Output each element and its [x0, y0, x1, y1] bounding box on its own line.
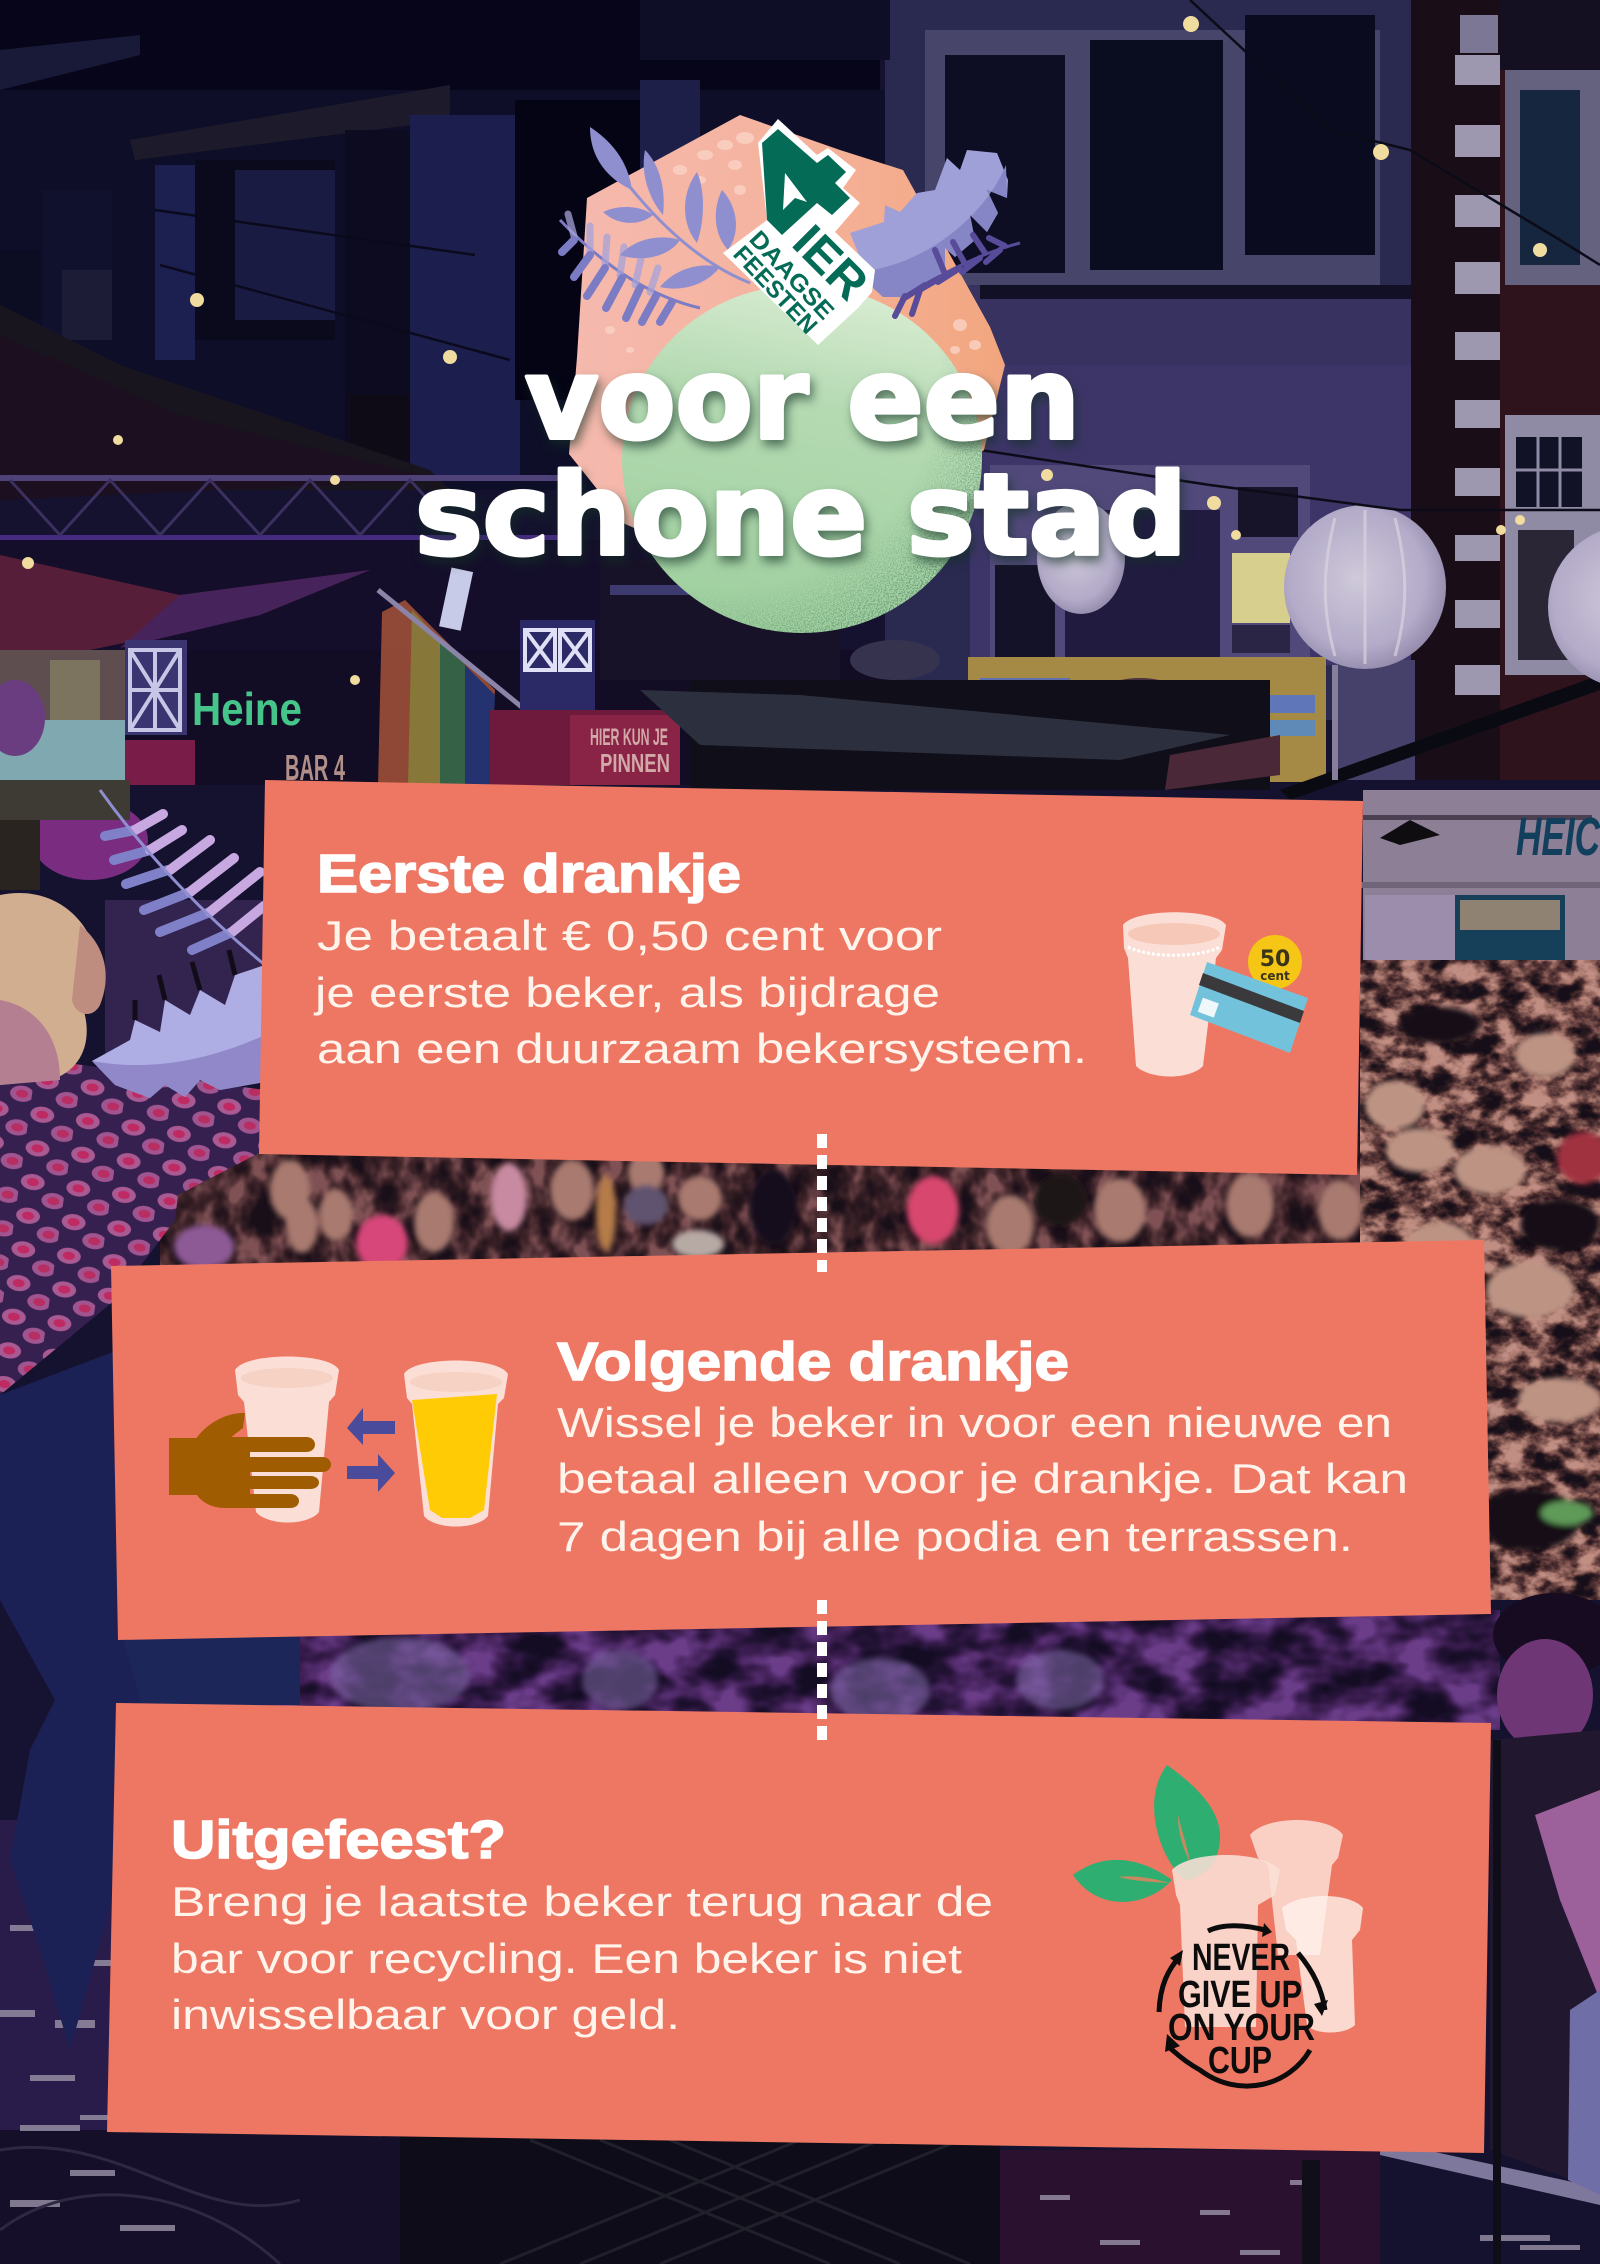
leaf: palm beside first panel: [92, 950, 265, 1098]
icon: cup with card and coin: 50: [1260, 947, 1290, 972]
heading: Eerste drankje: [317, 844, 741, 904]
lanterns: [1037, 502, 1125, 614]
icon: cup with card and coin: cent: [1260, 969, 1290, 983]
awnings and truss: [0, 305, 450, 490]
body text: bar voor recycling. Een beker is niet: [171, 1935, 962, 1982]
heading: Uitgefeest?: [171, 1810, 506, 1870]
stage floor left and bottom: [0, 1560, 250, 2264]
storefront right: [1363, 790, 1600, 980]
performer: [118, 1620, 300, 1705]
bar 4 sign: BAR 4: [285, 747, 345, 788]
title: schone stad: [415, 451, 1187, 581]
arrows: [347, 1408, 395, 1492]
logo: 4IER Daagse Feesten: FEESTEN: [728, 241, 822, 340]
panel: volgende drankje: [111, 1240, 1491, 1640]
panel: uitgefeest: [107, 1703, 1491, 2153]
rainbow flag: [378, 600, 495, 785]
dashed connector between panel 1 and 2: [817, 1134, 827, 1272]
body text: Je betaalt € 0,50 cent voor: [317, 912, 942, 959]
body text: inwisselbaar voor geld.: [171, 1991, 680, 2038]
logo: 4IER Daagse Feesten: IER: [782, 215, 878, 311]
decorative shape: peach hexagon: [569, 115, 1005, 600]
string lights: [1190, 0, 1600, 265]
title: voor een: [525, 335, 1080, 465]
body text: Wissel je beker in voor een nieuwe en: [557, 1399, 1392, 1446]
crowd texture: [160, 1130, 1380, 1290]
right building wall: [885, 0, 1415, 720]
panel: eerste drankje: [259, 780, 1363, 1175]
slogan badge: CUP: [1208, 2040, 1272, 2082]
icon: hand swapping cups: [169, 1356, 508, 1526]
body text: [313, 912, 1087, 1072]
body text: [171, 1878, 993, 2038]
hand: [169, 1413, 331, 1508]
body text: betaal alleen voor je drankje. Dat kan: [557, 1455, 1408, 1502]
upper windows: [925, 30, 1380, 285]
leaves: right palm and fern: [850, 150, 1020, 316]
truss tower: [520, 620, 595, 710]
title: [415, 335, 1187, 581]
brick column with quoins: [1411, 0, 1503, 780]
body text: [557, 1399, 1408, 1560]
slogan badge: [1159, 1923, 1328, 2086]
slogan badge: ON YOUR: [1168, 2007, 1315, 2049]
dashed connector between panel 2 and 3: [817, 1600, 827, 1740]
right building: [1500, 0, 1600, 780]
background photo: street festival: PINNEN: [600, 748, 670, 778]
icon: cup with card and coin: [1123, 912, 1308, 1076]
leaves: left branch: [560, 127, 750, 322]
slogan badge: NEVER: [1192, 1937, 1290, 1979]
body text: je eerste beker, als bijdrage: [313, 969, 940, 1016]
sign: Heineken: Heine: [192, 683, 302, 735]
hexagon speckles: [605, 132, 981, 354]
yellow sign: [968, 657, 1326, 782]
logo: 4IER Daagse Feesten: [723, 119, 878, 345]
body text: 7 dagen bij alle podia en terrassen.: [557, 1513, 1353, 1560]
body text: aan een duurzaam bekersysteem.: [317, 1025, 1087, 1072]
street level left: [0, 650, 900, 785]
man at right: [1493, 1593, 1600, 1677]
icon: cups, leaves and never give up on your cup: [1073, 1765, 1363, 2086]
logo: 4IER Daagse Feesten: DAAGSE: [744, 226, 839, 325]
crowd hands and faces: [174, 1007, 1600, 1722]
body text: Breng je laatste beker terug naar de: [171, 1878, 993, 1925]
decorative shape: green circle: [622, 290, 982, 633]
lower window: [990, 465, 1310, 665]
background photo: street festival: HIER KUN JE: [590, 724, 668, 751]
slogan badge: GIVE UP: [1178, 1974, 1302, 2016]
heading: Volgende drankje: [557, 1332, 1069, 1392]
leaf: fern beside first panel: [100, 790, 265, 965]
